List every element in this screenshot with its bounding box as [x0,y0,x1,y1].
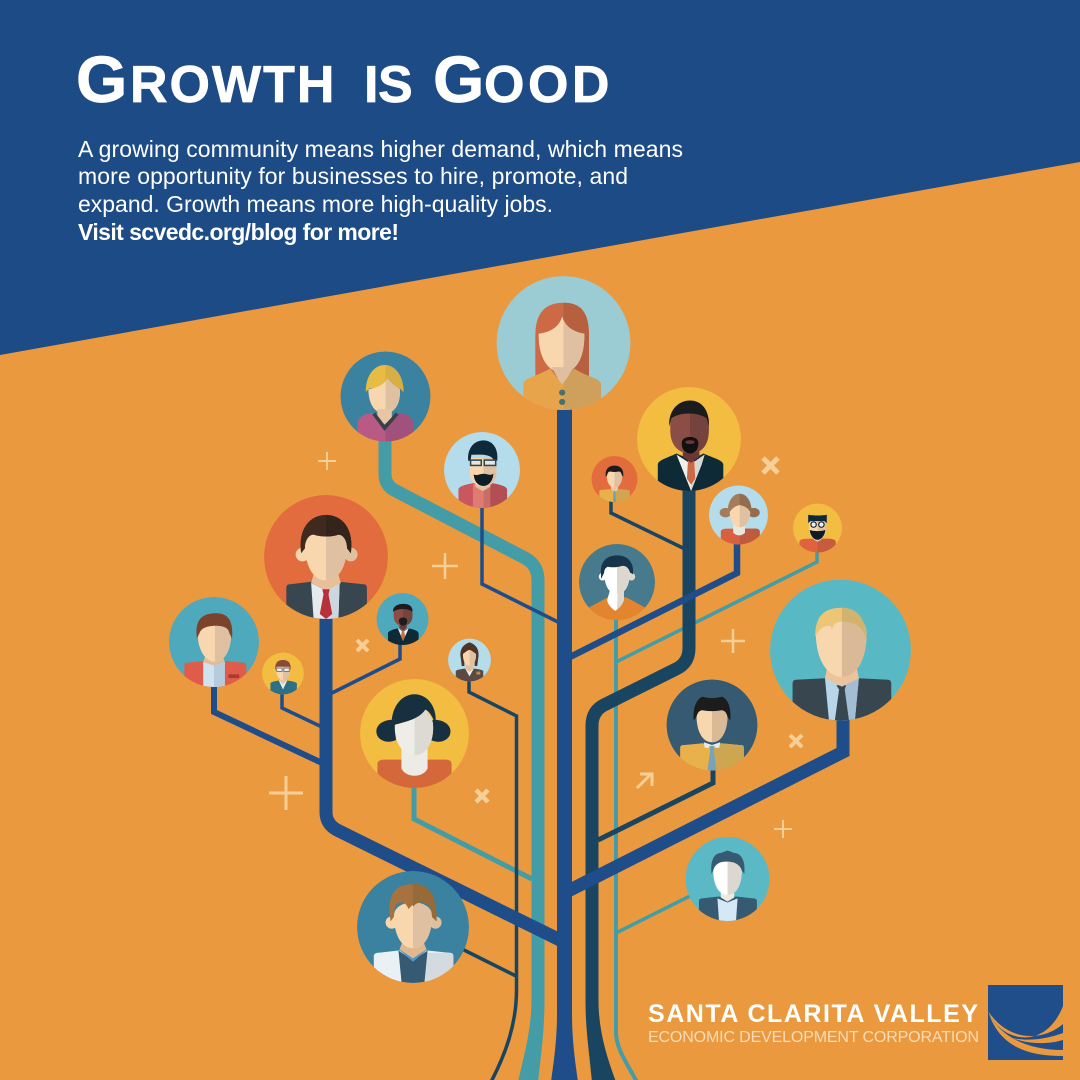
avatar: man in yellow jacket, dark blue [666,680,758,772]
title: G [76,42,127,116]
dark navy trunk base [586,1000,616,1080]
title: ROWTH [130,56,336,114]
avatar: woman with brown hair [709,486,768,546]
avatar: small man on orange [592,456,638,504]
title: IS [364,56,412,114]
intro paragraph: Visit scvedc.org/blog for more! [78,219,399,245]
teal branches [385,440,817,1080]
title: OOD [484,56,613,114]
intro paragraph: A growing community means higher demand, which means [78,136,683,162]
avatar: big man in dark suit with red tie [264,495,388,621]
avatar: bearded man on yellow [793,504,842,553]
tree branches and trunks [214,400,843,1080]
intro paragraph [78,136,683,245]
blue diagonal header band [0,0,1080,355]
logo mark [988,985,1063,1060]
avatar: large blond man in suit [770,580,911,723]
avatar: woman with dark pigtails [360,679,469,790]
avatar: bearded man with glasses, light blue [444,432,520,510]
decorative plus and cross marks [269,452,802,838]
avatar: man with brown hair, white jacket [357,871,469,985]
organisation name: SANTA CLARITA VALLEY [648,1000,978,1028]
avatar: small woman in brown jacket [448,638,491,682]
dark navy branches [460,488,713,1080]
avatar: blonde woman [340,352,430,443]
teal trunk base [518,1000,544,1080]
avatar: small man with glasses on yellow [262,652,304,695]
intro paragraph: expand. Growth means more high-quality jobs. [78,191,553,217]
organisation name [648,1000,979,1046]
avatar: man with red jacket [169,597,259,689]
blue branches [214,505,843,940]
avatar: black man in suit [637,387,741,493]
intro paragraph: more opportunity for businesses to hire, promote, and [78,163,628,189]
organisation name: ECONOMIC DEVELOPMENT CORPORATION [648,1029,979,1046]
central blue trunk [551,400,578,1080]
title: G [433,42,484,116]
avatar: red-haired woman [496,276,630,413]
avatar: person with white face, orange top [579,544,655,622]
avatar: black man on teal [376,593,428,646]
avatar: man with white face, teal background [686,837,770,923]
